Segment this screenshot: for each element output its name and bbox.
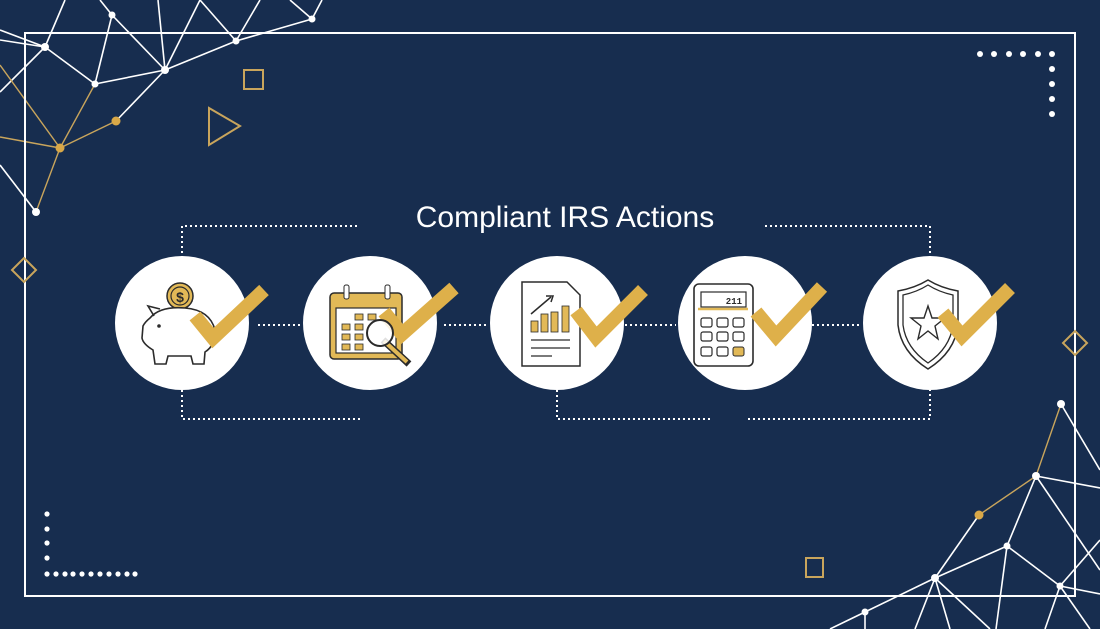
step 1: piggy bank: $: [176, 289, 184, 305]
dots: bottom-left: [44, 511, 138, 577]
step 1: piggy bank: [115, 256, 264, 390]
title: Compliant IRS Actions: [416, 201, 714, 234]
step 4: calculator: [678, 256, 822, 390]
step 3: report with chart: [490, 256, 643, 390]
dots: top-right: [977, 51, 1055, 117]
step 4: calculator: 211: [726, 297, 743, 307]
step 2: calendar with magnifier: [303, 256, 454, 390]
dotted connectors: [182, 226, 930, 419]
step 5: shield with star: [863, 256, 1010, 390]
network: bottom-right: [830, 404, 1100, 629]
network: top-left: [0, 0, 322, 212]
decorative gold shapes: [12, 70, 1087, 577]
